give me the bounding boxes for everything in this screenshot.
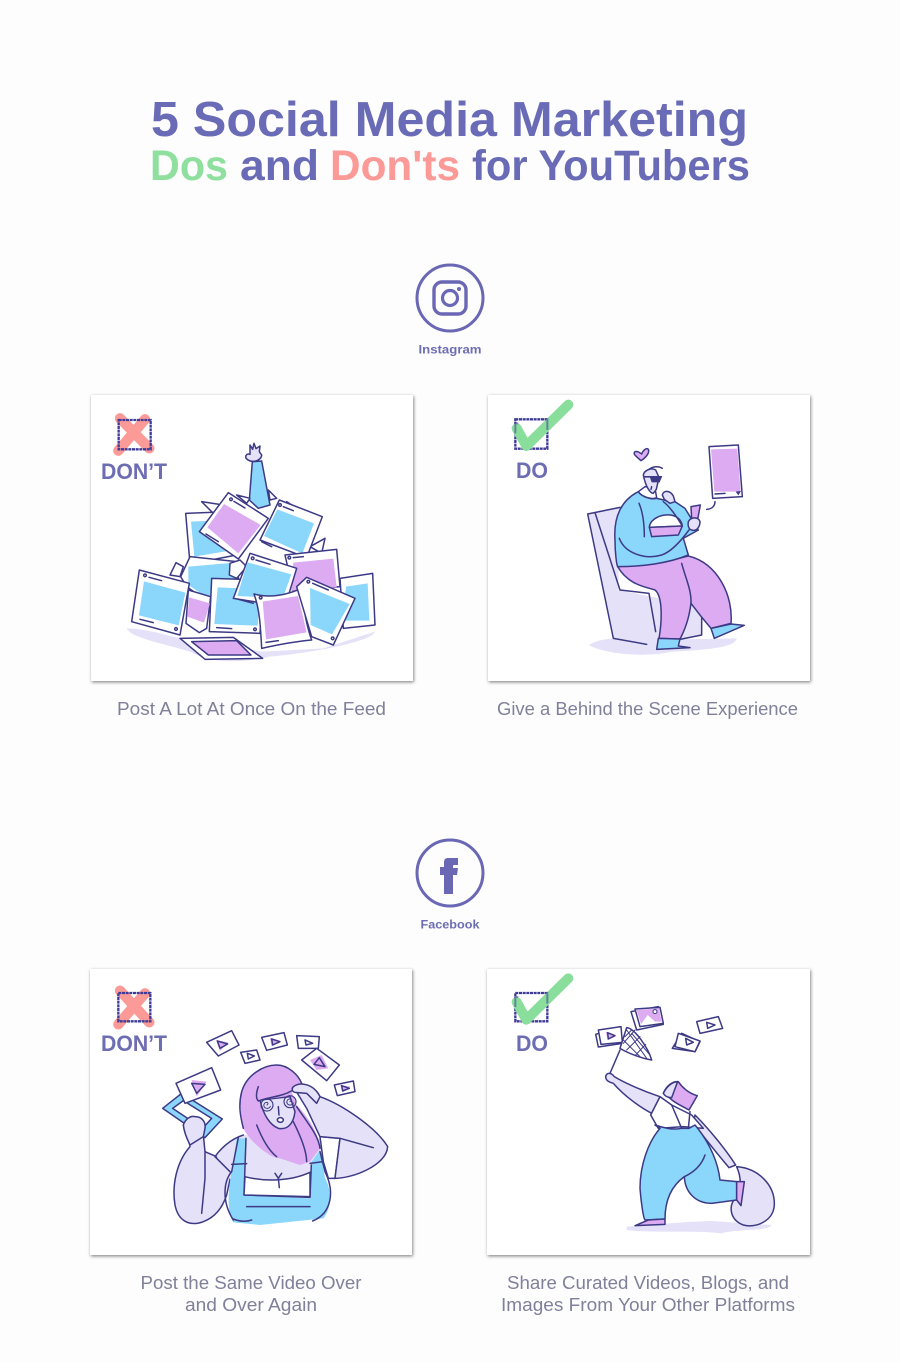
card — [488, 395, 810, 681]
label: Instagram: Instagram — [418, 344, 482, 356]
caption: Post the Same Video Over — [140, 1272, 362, 1293]
title: Dos — [150, 142, 228, 190]
panel: facebook don't — [90, 969, 412, 1315]
title: 5 Social Media Marketing — [151, 93, 748, 147]
caption line 2: Images From Your Other Platforms — [501, 1294, 795, 1315]
card — [487, 969, 810, 1255]
title: and — [240, 142, 319, 190]
label: Facebook: Facebook — [420, 920, 480, 932]
icon: check checkbox — [515, 405, 568, 449]
icon: cross checkbox — [118, 418, 151, 451]
panel: instagram don't — [91, 395, 413, 719]
icon: facebook — [417, 840, 483, 906]
title: Don'ts — [330, 142, 460, 190]
title: for YouTubers — [472, 142, 750, 190]
card — [90, 969, 412, 1255]
illustration: person with popcorn and phone — [588, 445, 744, 655]
illustration: pile of posts — [127, 443, 375, 661]
card — [91, 395, 413, 681]
panel: instagram do — [488, 395, 810, 719]
caption: Give a Behind the Scene Experience — [497, 698, 798, 719]
caption: Share Curated Videos, Blogs, and — [507, 1272, 789, 1293]
illustration: person catching content with a net — [596, 1007, 774, 1233]
illustration: dizzy woman with repeated videos — [163, 1031, 388, 1225]
panel: facebook do — [487, 969, 810, 1315]
label: do: DO — [516, 458, 548, 483]
label: don't: DON’T — [101, 1031, 168, 1056]
label: do: DO — [516, 1031, 548, 1056]
caption: Post A Lot At Once On the Feed — [117, 698, 386, 719]
icon: cross checkbox — [118, 991, 150, 1024]
title — [150, 93, 750, 190]
caption line 2: and Over Again — [185, 1294, 317, 1315]
label: don't: DON’T — [101, 459, 168, 484]
icon: check checkbox — [515, 978, 568, 1021]
icon: instagram — [417, 265, 483, 331]
